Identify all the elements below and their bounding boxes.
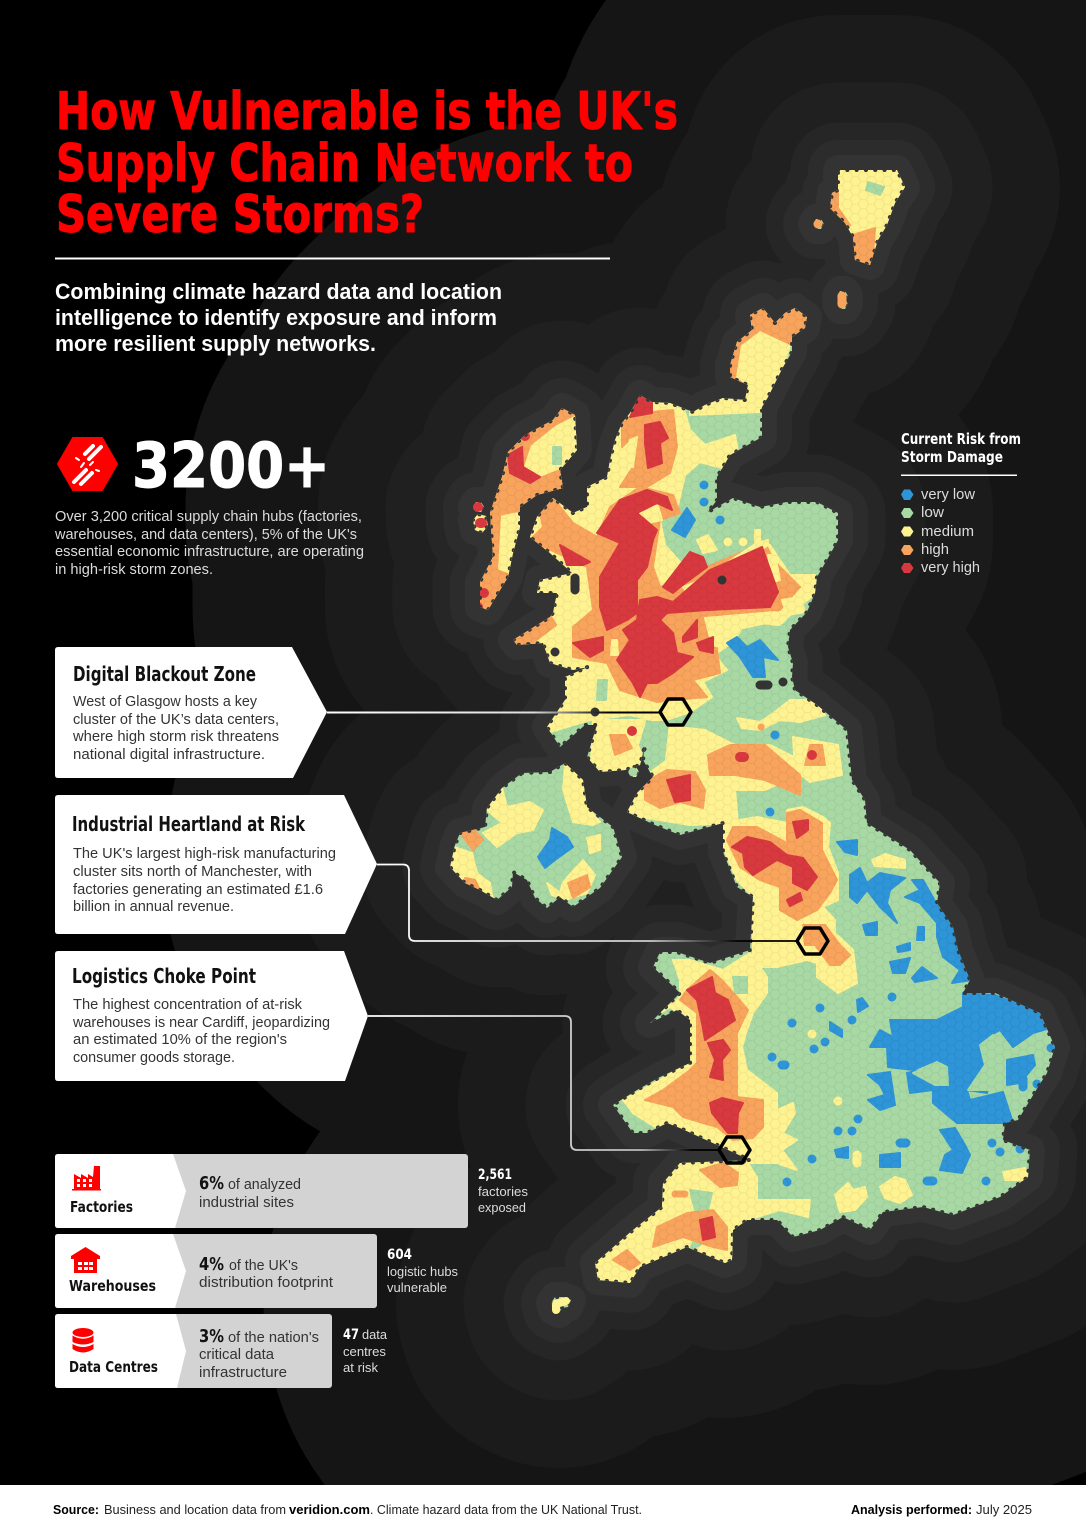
panel body: cluster of the UK’s data centers, [73, 712, 279, 728]
value: 4% [199, 1254, 224, 1275]
value [199, 1254, 334, 1291]
title: How Vulnerable is the UK's [56, 82, 678, 142]
side note: logistic hubs [387, 1264, 458, 1279]
panel: Digital Blackout Zone [55, 647, 327, 778]
side note: factories [478, 1184, 528, 1199]
value: industrial sites [199, 1194, 294, 1211]
panel: Logistics Choke Point [55, 951, 368, 1081]
stat bar: Warehouses [55, 1234, 458, 1308]
value [199, 1173, 301, 1211]
legend heading: Storm Damage [901, 448, 1003, 466]
value: of analyzed [228, 1176, 301, 1193]
orange: high risk areas [460, 190, 875, 1270]
value: distribution footprint [199, 1274, 334, 1291]
panel body: West of Glasgow hosts a key [73, 694, 258, 710]
legend items: medium [921, 524, 974, 540]
panel body: consumer goods storage. [73, 1050, 235, 1066]
value: critical data [199, 1346, 275, 1363]
dark empty hexes [555, 578, 783, 1160]
icon: broken chain hexagon [58, 438, 117, 490]
side note: centres [343, 1344, 386, 1359]
panel heading: Industrial Heartland at Risk [72, 812, 306, 836]
footer: Source: [53, 1502, 99, 1517]
panel body: factories generating an estimated £1.6 [73, 882, 323, 898]
side note: 604 [387, 1247, 412, 1263]
panel heading: Digital Blackout Zone [73, 662, 256, 686]
legend [901, 430, 1021, 576]
connector: Industrial Heartland to Manchester marker [377, 864, 828, 954]
green patches inside yellow [553, 182, 884, 1250]
label: Factories [70, 1198, 133, 1216]
subtitle: Combining climate hazard data and location [55, 279, 502, 304]
side note [478, 1167, 528, 1215]
footer: veridion.com [289, 1502, 370, 1517]
subtitle [55, 279, 502, 356]
stat number: 3200+ [132, 429, 330, 502]
value [199, 1326, 319, 1381]
icon: database [72, 1328, 94, 1352]
stat description: warehouses, and data centers), 5% of the UK's [54, 527, 357, 543]
title: Supply Chain Network to [56, 134, 633, 194]
stat description [54, 509, 364, 578]
panel: Industrial Heartland at Risk [55, 795, 377, 934]
legend items: high [921, 542, 949, 558]
label: Warehouses [69, 1277, 156, 1295]
stat bar: Factories [55, 1154, 528, 1228]
panel body: The UK's largest high-risk manufacturing [73, 846, 336, 862]
side note: vulnerable [387, 1280, 447, 1295]
title [56, 82, 678, 245]
stat bar: Data Centres [55, 1314, 388, 1388]
footer: . Climate hazard data from the UK National Trust. [370, 1502, 642, 1517]
value: infrastructure [199, 1364, 287, 1381]
title: Severe Storms? [56, 185, 424, 245]
blue: very low risk areas [538, 485, 1051, 1182]
side note [387, 1247, 458, 1295]
footer [0, 1485, 1086, 1536]
panel body [73, 846, 336, 915]
legend items: very low [921, 487, 976, 503]
legend items: low [921, 505, 945, 521]
small islands [478, 224, 842, 1310]
panel body [72, 694, 279, 763]
side note: 2,561 [478, 1167, 512, 1183]
key stat: 3200+ [54, 429, 364, 578]
footer: July 2025 [976, 1502, 1032, 1517]
value: of the nation's [228, 1329, 319, 1346]
panel body: an estimated 10% of the region's [73, 1032, 287, 1048]
legend items [901, 487, 980, 576]
value: 6% [199, 1173, 224, 1194]
title divider [55, 258, 610, 260]
side note [343, 1327, 388, 1375]
panel body: warehouses is near Cardiff, jeopardizing [72, 1015, 330, 1031]
contour bands around the UK [450, 170, 1055, 1313]
panel heading: Logistics Choke Point [72, 964, 256, 988]
icon: factory [72, 1166, 101, 1190]
side note: data [362, 1327, 388, 1342]
legend heading [901, 430, 1021, 466]
icon: warehouse [71, 1247, 100, 1273]
legend heading: Current Risk from [901, 430, 1021, 448]
green pockets inside blue [913, 1035, 998, 1090]
hex risk map of the UK [440, 160, 1070, 1320]
red: very high risk areas [478, 395, 817, 1240]
side note: exposed [478, 1200, 526, 1215]
panel body: billion in annual revenue. [73, 899, 234, 915]
label: Data Centres [69, 1358, 158, 1376]
subtitle: intelligence to identify exposure and inform [55, 305, 497, 330]
value: of the UK's [229, 1257, 298, 1274]
panel body [72, 997, 330, 1066]
footer: Analysis performed: [851, 1502, 972, 1517]
subtitle: more resilient supply networks. [55, 331, 376, 356]
panel body: where high storm risk threatens [72, 729, 279, 745]
side note: 47 [343, 1327, 359, 1343]
side note: at risk [343, 1360, 379, 1375]
footer: Business and location data from [104, 1502, 286, 1517]
panel body: cluster sits north of Manchester, with [73, 864, 312, 880]
connector: Digital Blackout Zone to Glasgow marker [327, 699, 691, 725]
legend items: very high [921, 560, 980, 576]
connector: Logistics Choke Point to Cardiff marker [368, 1016, 750, 1163]
panel body: national digital infrastructure. [73, 747, 265, 763]
stat description: Over 3,200 critical supply chain hubs (factories, [55, 509, 362, 525]
stat description: in high-risk storm zones. [55, 562, 213, 578]
yellow: medium risk areas [448, 160, 1030, 1290]
yellow specks in orange [611, 437, 805, 655]
value: 3% [199, 1326, 224, 1347]
panel body: The highest concentration of at-risk [73, 997, 303, 1013]
stat description: essential economic infrastructure, are operating [55, 544, 364, 560]
